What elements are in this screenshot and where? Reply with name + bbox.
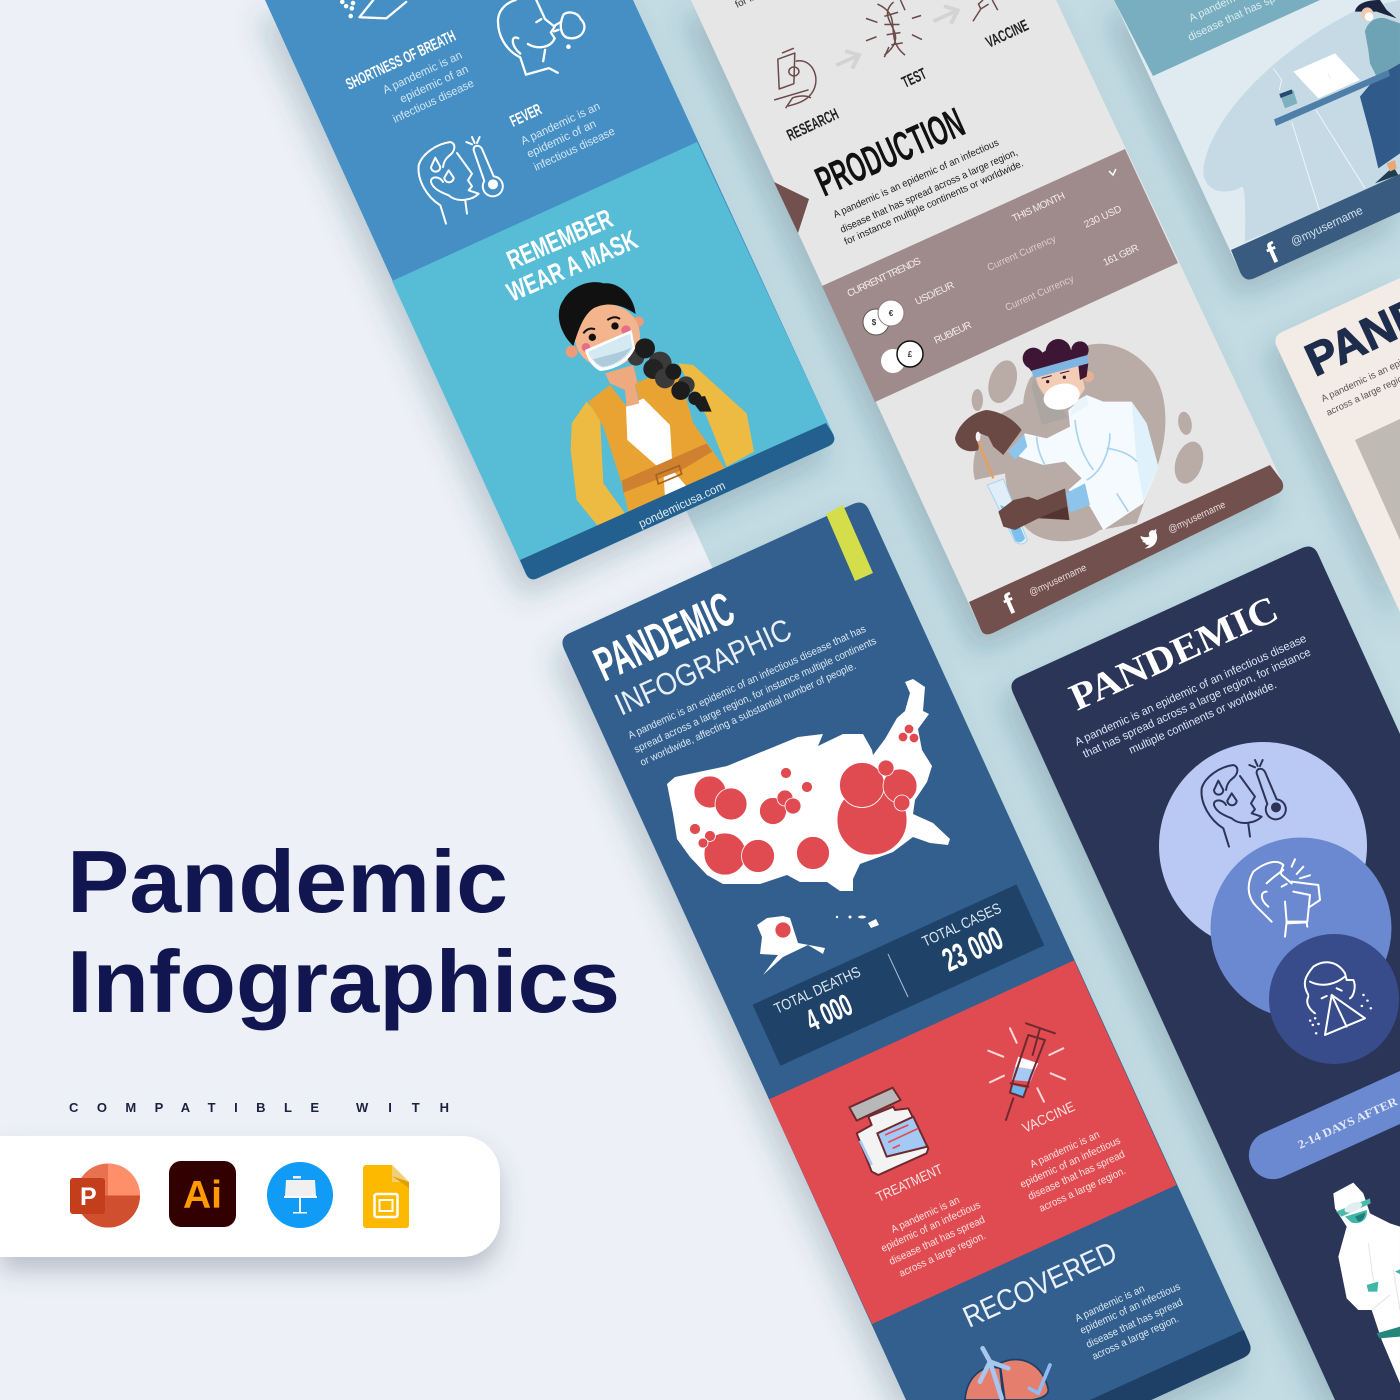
- heading: production: PRODUCTION: [809, 98, 971, 205]
- icon: cough: [1249, 859, 1320, 937]
- stat: total deaths: TOTAL DEATHS: [772, 964, 863, 1018]
- heading: pandemic serif: PANDEMIC: [1063, 588, 1285, 719]
- text: intro: A pandemic is an epidemic of an infectious disease that has: [626, 623, 868, 742]
- heading: infographic: INFOGRAPHIC: [609, 612, 797, 722]
- top band: [1114, 0, 1320, 76]
- map: case bubbles: [690, 724, 919, 938]
- text: intro: A pandemic is an epidemic of an infectious disease: [1073, 633, 1308, 749]
- divider: [888, 954, 908, 997]
- text: fever description: [519, 100, 617, 174]
- labels: currency table: CURRENT TRENDS: [846, 256, 923, 300]
- circle: sneeze: [1269, 934, 1399, 1064]
- card: production: [691, 0, 1283, 634]
- text: breath description: A pandemic is an: [381, 49, 464, 97]
- swoosh: [1203, 0, 1400, 242]
- text: intro: or worldwide, affecting a substantial number of people.: [638, 660, 858, 769]
- text: current currency: Current Currency: [986, 234, 1058, 274]
- title: pandemic infographics: Infographics: [67, 932, 620, 1031]
- text: breath description: [381, 49, 476, 126]
- text: username: @myusername: [1028, 562, 1089, 599]
- text: production description: for instance multiple continents or worldwide.: [843, 158, 1025, 248]
- labels: process steps: VACCINE: [984, 17, 1032, 52]
- text: vaccine description: A pandemic is an: [1028, 1129, 1102, 1171]
- text: intro: multiple continents or worldwide.: [1127, 679, 1279, 757]
- label: compatible with: COMPATIBLE: [69, 1100, 319, 1115]
- icon: illustrator: [169, 1161, 236, 1227]
- text: treatment description: [879, 1194, 988, 1280]
- circle: fever: [1159, 742, 1367, 950]
- pill: days after: [1249, 1071, 1400, 1179]
- icon: facebook: f: [1262, 237, 1284, 270]
- text: production description: disease that has spread across a large region,: [839, 147, 1020, 236]
- labels: currency table: 161 GBR: [1102, 243, 1141, 269]
- label: compatible with: [69, 1100, 449, 1115]
- section: remember wear a mask: [392, 142, 834, 579]
- illustration: scientist: [955, 339, 1208, 544]
- labels: process steps: [785, 17, 1032, 145]
- icon: sneeze: [1305, 962, 1371, 1035]
- stat: total deaths: [772, 964, 863, 1038]
- map: united states: [667, 679, 950, 891]
- heading: recovered: RECOVERED: [958, 1236, 1122, 1334]
- image placeholder: [1355, 419, 1400, 540]
- labels: currency table: 230 USD: [1083, 204, 1124, 231]
- card: symptoms and mask: [265, 0, 834, 579]
- labels: currency table: USD/EUR: [914, 280, 956, 308]
- icon: shortness of breath: [498, 0, 584, 75]
- text: recovered description: epidemic of an infectious: [1078, 1281, 1182, 1337]
- icon: vaccine syringe: [988, 1023, 1065, 1120]
- title: pandemic infographics: Pandemic: [67, 832, 508, 931]
- text: current currency: Current Currency: [1004, 274, 1076, 314]
- icon: facebook: f: [999, 588, 1021, 621]
- card: navy pandemic: [1011, 546, 1400, 1400]
- text: intro: spread across a large region, for instance multiple continents: [632, 635, 878, 756]
- illustration: person at desk: [1203, 0, 1400, 242]
- text: current currency: [986, 234, 1076, 314]
- text: fever description: epidemic of an: [525, 118, 598, 161]
- card: teal top right: [1114, 0, 1400, 280]
- text: recovered description: disease that has spread: [1084, 1296, 1185, 1351]
- labels: currency table: THIS MONTH: [1011, 191, 1067, 225]
- map: alaska: [757, 916, 825, 975]
- text: intro: that has spread across a large region, for instance: [1081, 647, 1313, 761]
- text: treatment description: A pandemic is an: [889, 1194, 962, 1236]
- icon: google slides: [363, 1165, 409, 1228]
- text: recovered description: A pandemic is an: [1073, 1283, 1147, 1325]
- icon: twitter: [1139, 528, 1163, 550]
- label: vaccine: VACCINE: [1020, 1098, 1077, 1136]
- labels: currency table: [846, 191, 1141, 347]
- text: fever description: infectious disease: [532, 126, 617, 174]
- heading: fever: FEVER: [508, 101, 545, 131]
- stat: total cases: [920, 900, 1008, 978]
- heading: remember wear a mask: WEAR A MASK: [502, 224, 642, 308]
- circle: cough: [1210, 838, 1392, 1018]
- labels: process steps: TEST: [900, 66, 929, 92]
- panel: current trends: [822, 149, 1178, 402]
- arrow: research to test: [836, 51, 859, 69]
- icon: keynote: [267, 1162, 333, 1228]
- icon: medicine bottle: [849, 1088, 928, 1175]
- icon: lungs: [965, 1348, 1050, 1400]
- icon: powerpoint: P: [80, 1183, 97, 1211]
- illustration: woman with mask: [559, 282, 754, 527]
- text: breath description: epidemic of an: [398, 64, 470, 106]
- icon: chevron: [1109, 169, 1116, 175]
- icon: brown triangle: [774, 182, 809, 233]
- text: username: @myusername: [1288, 203, 1365, 249]
- icon: dna test: [866, 0, 922, 57]
- text: recovered description: [1073, 1281, 1185, 1363]
- footer band: [520, 423, 834, 579]
- text: vaccine description: disease that has spread: [1026, 1148, 1127, 1203]
- footer: social links: [969, 465, 1283, 634]
- text: username: @myusername: [1167, 499, 1228, 536]
- text: fever description: A pandemic is an: [519, 100, 602, 148]
- text: days after: 2-14 DAYS AFTER: [1295, 1094, 1400, 1152]
- stat: total deaths: 4 000: [800, 987, 858, 1038]
- icon: fever: [418, 137, 503, 224]
- accent stripe: [826, 505, 873, 581]
- icon: powerpoint: [70, 1164, 140, 1228]
- stat: total cases: 23 000: [937, 919, 1008, 978]
- text: production description: A pandemic is an epidemic of an infectious: [832, 137, 1001, 221]
- stats band: [753, 884, 1044, 1066]
- map: hawaii: [836, 916, 879, 928]
- icons: currency coins: €: [889, 309, 894, 318]
- icon: fever face: [1201, 760, 1286, 847]
- text: treatment description: across a large region.: [897, 1230, 988, 1280]
- background: light blue panel: [454, 0, 1400, 1400]
- text: vaccine description: epidemic of an infectious: [1018, 1135, 1122, 1191]
- labels: process steps: RESEARCH: [785, 106, 842, 145]
- arrow: test to vaccine: [933, 6, 958, 24]
- card: pandemic infographic map: [562, 502, 1251, 1400]
- icon: microscope: [774, 48, 816, 108]
- label: compatible with: WITH: [356, 1100, 449, 1115]
- icons: currency coins: $: [872, 318, 877, 327]
- footer text: website: pondemicusa.com: [636, 478, 727, 531]
- red section: [769, 960, 1176, 1324]
- text: recovered description: across a large region.: [1090, 1313, 1181, 1363]
- icon: tissue top: [341, 0, 406, 18]
- text: treatment description: epidemic of an infectious: [879, 1199, 983, 1255]
- text: vaccine description: [1018, 1129, 1128, 1215]
- label: treatment: TREATMENT: [874, 1161, 945, 1205]
- illustration: hazmat worker: [1333, 1183, 1400, 1383]
- background blobs: [972, 344, 1208, 541]
- heading: remember wear a mask: REMEMBER: [502, 203, 617, 276]
- footer: [1231, 174, 1400, 280]
- icon: syringe: [973, 0, 998, 21]
- text: breath description: infectious disease: [391, 78, 476, 126]
- labels: currency table: RUB/EUR: [933, 320, 974, 347]
- stat: total cases: TOTAL CASES: [920, 900, 1004, 951]
- panel: app icons: [0, 1136, 500, 1257]
- heading: pandemic: PANDEMIC: [587, 583, 742, 692]
- icons: currency coins: [863, 300, 923, 373]
- icon: illustrator: Ai: [183, 1174, 222, 1217]
- text: vaccine description: across a large region.: [1037, 1165, 1128, 1215]
- icons: currency coins: £: [908, 350, 913, 359]
- footer band: [1090, 1330, 1251, 1400]
- text: treatment description: disease that has spread: [887, 1214, 987, 1268]
- card: beige right: [1275, 278, 1400, 612]
- title: pandemic infographics: [67, 832, 620, 1031]
